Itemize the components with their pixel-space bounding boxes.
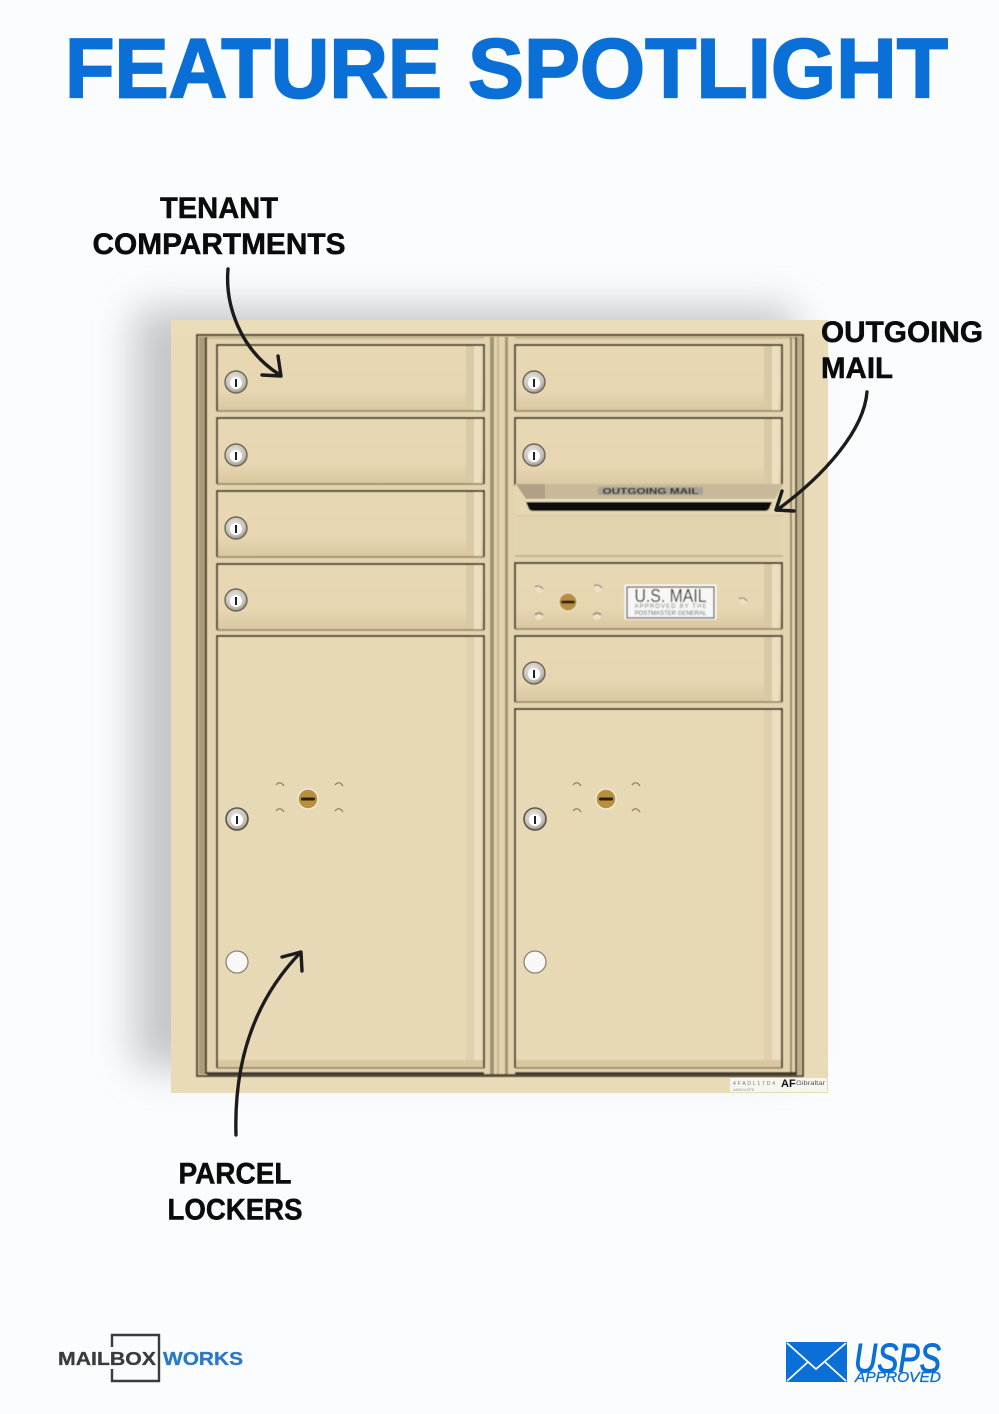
label: parcel lockers: LOCKERS xyxy=(168,1194,302,1226)
outgoing mail plate xyxy=(598,487,703,496)
label: tenant compartments: COMPARTMENTS xyxy=(92,228,346,261)
manufacturer label xyxy=(730,1078,827,1092)
manufacturer label: ANSI/USPS xyxy=(733,1087,755,1092)
manufacturer label: Gibraltar xyxy=(796,1081,825,1087)
label: outgoing mail: OUTGOING xyxy=(821,316,983,349)
title: FEATURE xyxy=(65,22,442,116)
logo: Mailbox Works: WORKS xyxy=(163,1348,243,1369)
icon: envelope xyxy=(786,1342,847,1382)
title: SPOTLIGHT xyxy=(468,22,948,116)
U.S. Mail plate: APPROVED BY THE xyxy=(634,604,706,610)
manufacturer label: AF xyxy=(781,1078,796,1090)
panel: right tenant compartments xyxy=(515,345,782,488)
U.S. Mail plate: POSTMASTER GENERAL xyxy=(634,611,707,617)
right parcel plug xyxy=(524,951,546,973)
right parcel lock cluster xyxy=(573,783,640,812)
logo: USPS Approved xyxy=(786,1335,941,1386)
center mullion xyxy=(484,337,515,1074)
U.S. Mail plate: U.S. MAIL xyxy=(634,586,706,606)
unit drop shadow xyxy=(135,308,795,1068)
brass lock xyxy=(559,593,577,611)
label: tenant compartments xyxy=(92,192,346,261)
door L3 xyxy=(217,491,484,557)
outgoing mail slot panel xyxy=(515,484,783,557)
label: tenant compartments: TENANT xyxy=(160,192,278,225)
mailbox unit xyxy=(135,308,828,1093)
arrow: outgoing mail xyxy=(776,392,867,511)
door R5 xyxy=(515,636,782,702)
left parcel lock cluster xyxy=(276,783,343,812)
outgoing mail plate: OUTGOING MAIL xyxy=(602,487,699,496)
label: outgoing mail: MAIL xyxy=(821,352,893,385)
label: parcel lockers xyxy=(168,1158,302,1226)
label: parcel lockers: PARCEL xyxy=(178,1158,292,1190)
slot opening xyxy=(526,502,772,511)
label: outgoing mail xyxy=(821,316,983,385)
slot hood xyxy=(516,484,783,499)
door R2 xyxy=(515,418,782,488)
door L1 xyxy=(217,345,484,411)
door L4 xyxy=(217,564,484,630)
outer frame xyxy=(171,320,828,1093)
left parcel plug xyxy=(226,951,248,973)
arrow: tenant compartments xyxy=(228,269,281,376)
logo: USPS Approved: USPS xyxy=(854,1335,941,1381)
logo: Mailbox Works: MAILBOX xyxy=(58,1348,157,1369)
panel: collection door with U.S. Mail plate xyxy=(515,563,782,629)
panel: right parcel locker xyxy=(515,709,782,1068)
manufacturer label: 4 F A D L 1 7 D 4 xyxy=(733,1081,775,1087)
door L2 xyxy=(217,418,484,484)
rivets xyxy=(535,584,747,620)
tenant locks xyxy=(225,371,546,830)
door R1 xyxy=(515,345,782,411)
U.S. Mail plate xyxy=(625,585,716,619)
panel: left parcel locker xyxy=(217,636,484,1068)
logo: Mailbox Works xyxy=(58,1335,243,1381)
logo: USPS Approved: APPROVED xyxy=(854,1370,941,1386)
arrow: parcel lockers xyxy=(236,952,302,1135)
title xyxy=(65,22,948,116)
inner frame channel xyxy=(196,334,804,1077)
panel: left tenant compartments xyxy=(217,345,484,630)
